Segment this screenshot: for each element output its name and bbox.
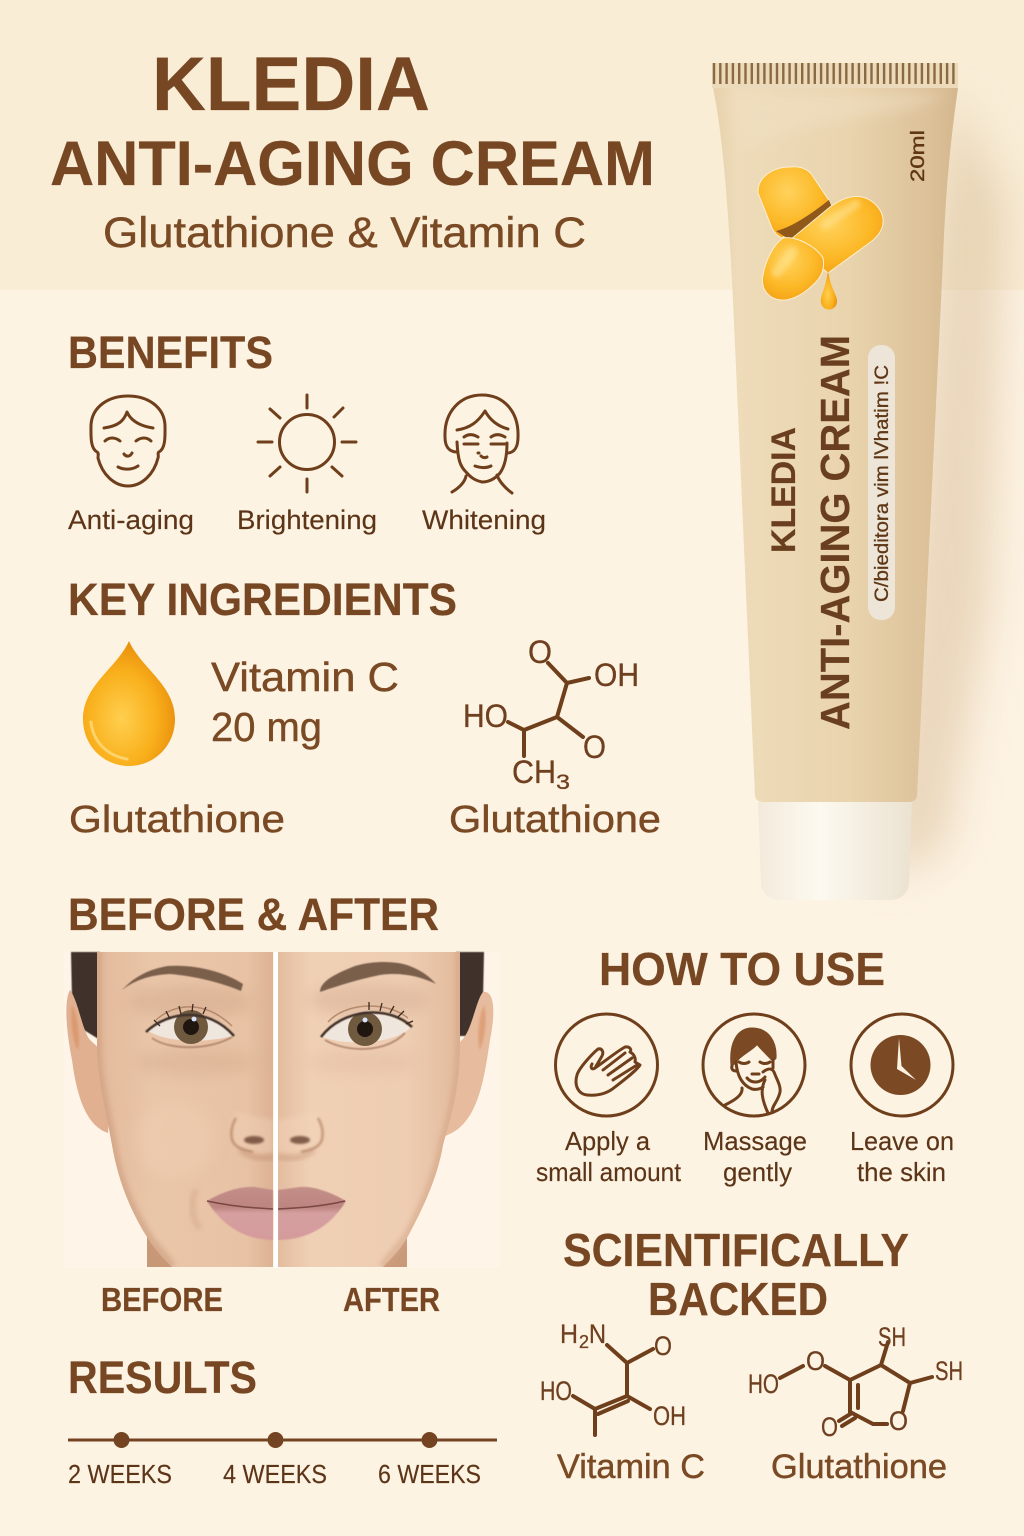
left inner ear — [71, 1005, 79, 1050]
icon: anti-aging face — [91, 396, 165, 486]
label: 2 weeks: 2 WEEKS — [68, 1459, 172, 1489]
molecule: vitamin c: HO — [540, 1376, 572, 1406]
icon: golden drop — [83, 641, 175, 766]
icon: massage face — [703, 1014, 805, 1116]
how to use heading: HOW TO USE — [599, 943, 885, 995]
right hair — [456, 952, 484, 1036]
molecule: glutathione: HO — [463, 698, 508, 734]
left ear — [66, 990, 112, 1133]
right ear — [440, 992, 493, 1136]
capsule: bottom left — [762, 238, 824, 300]
capsule band — [776, 200, 832, 240]
tube product name: ANTI-AGING CREAM — [812, 335, 858, 730]
scientifically backed heading: SCIENTIFICALLY — [563, 1224, 909, 1276]
label: brightening: Brightening — [237, 505, 377, 535]
right eyebrow — [320, 962, 436, 992]
molecule: vitamin c: N — [589, 1319, 606, 1349]
title: product: ANTI-AGING CREAM — [50, 129, 655, 199]
lip line — [207, 1201, 345, 1209]
molecule: glutathione: HO — [748, 1369, 779, 1399]
step 2 label — [703, 1126, 807, 1187]
title: brand: KLEDIA — [152, 42, 430, 127]
icon: sun — [258, 395, 356, 492]
benefits heading: BENEFITS — [68, 327, 273, 378]
molecule: glutathione: O — [889, 1406, 908, 1436]
tube ingredient pill: C/bieditora vim lVhatim !C — [872, 365, 893, 602]
step 1 label — [536, 1126, 682, 1187]
divider — [274, 952, 278, 1268]
panel: before and after — [64, 889, 500, 1318]
molecule: glutathione: O — [583, 729, 606, 765]
label: whitening: Whitening — [422, 505, 546, 535]
right eye — [321, 1002, 413, 1049]
label: vitamin c: Vitamin C — [557, 1448, 705, 1486]
capsule: right — [790, 196, 883, 273]
left face half — [90, 950, 274, 1268]
label: glutathione right: Glutathione — [449, 799, 661, 841]
before after heading: BEFORE & AFTER — [68, 889, 439, 940]
dose text: 20 mg — [211, 704, 322, 750]
tube crimp — [712, 63, 958, 88]
capsule highlight left — [777, 252, 792, 272]
20ml label: 20ml — [908, 130, 929, 182]
capsule illustration — [758, 167, 883, 310]
label: anti-aging: Anti-aging — [68, 505, 194, 535]
left eye — [146, 1004, 234, 1047]
label: before: BEFORE — [101, 1281, 223, 1318]
title block — [50, 42, 655, 257]
molecule: vitamin c: H — [560, 1319, 578, 1349]
scientifically backed heading — [563, 1224, 909, 1325]
molecule: glutathione — [748, 1322, 963, 1442]
molecule: glutathione: SH — [878, 1322, 906, 1352]
left eyebrow — [122, 966, 243, 991]
icon: whitening face — [445, 395, 518, 493]
step 3 label: the skin — [857, 1157, 946, 1187]
tube ingredient pill — [868, 345, 895, 620]
molecule: vitamin c: OH — [653, 1401, 686, 1431]
molecule: vitamin c: 2 — [579, 1332, 589, 1352]
tube body — [713, 88, 958, 802]
icon: clock — [851, 1014, 953, 1116]
label: 4 weeks: 4 WEEKS — [223, 1459, 327, 1489]
step 1 label: small amount — [536, 1157, 682, 1187]
tube brand: KLEDIA — [765, 427, 803, 553]
key ingredients heading: KEY INGREDIENTS — [68, 574, 457, 625]
right face half — [278, 950, 462, 1268]
label: after: AFTER — [343, 1281, 440, 1318]
header band — [0, 0, 1024, 290]
tube cap — [758, 802, 912, 900]
molecule: vitamin c: O — [654, 1331, 672, 1361]
label: glutathione left: Glutathione — [69, 799, 285, 841]
molecule: glutathione: 3 — [556, 771, 570, 794]
photo: face comparison — [64, 950, 500, 1268]
panel: key ingredients — [68, 574, 661, 841]
right inner ear — [478, 1005, 486, 1050]
left hair — [71, 952, 100, 1040]
molecule: glutathione: OH — [594, 657, 639, 693]
label: glutathione: Glutathione — [771, 1448, 947, 1486]
label: 6 weeks: 6 WEEKS — [378, 1459, 481, 1489]
step 2 label: gently — [723, 1157, 792, 1187]
molecule: glutathione: CH — [512, 754, 556, 790]
panel: scientifically backed — [540, 1224, 963, 1486]
tube highlight — [728, 94, 945, 150]
oil drop — [821, 270, 837, 310]
step 3 label — [850, 1126, 954, 1187]
product tube — [712, 63, 1005, 900]
left lips — [207, 1187, 273, 1240]
molecule: vitamin c — [540, 1319, 686, 1435]
molecule: glutathione: SH — [935, 1356, 963, 1386]
step 1 label: Apply a — [565, 1126, 651, 1156]
vitamin c text: Vitamin C — [211, 654, 399, 700]
molecule: glutathione: O — [528, 634, 552, 670]
panel: benefits — [68, 327, 546, 535]
panel: results — [68, 1352, 497, 1489]
molecule: glutathione: O — [821, 1412, 838, 1442]
subtitle: Glutathione & Vitamin C — [103, 209, 586, 257]
step 3 label: Leave on — [850, 1126, 954, 1156]
results heading: RESULTS — [68, 1352, 257, 1403]
icon: hand — [556, 1014, 658, 1116]
panel: how to use — [536, 943, 954, 1187]
molecule: glutathione: O — [806, 1346, 825, 1376]
scientifically backed heading: BACKED — [648, 1273, 828, 1325]
capsule: top left — [758, 167, 830, 238]
molecule: glutathione — [463, 634, 639, 794]
tube shadow — [880, 90, 1005, 880]
capsule highlight right — [825, 204, 856, 225]
step 2 label: Massage — [703, 1126, 807, 1156]
right lips — [278, 1187, 346, 1240]
timeline — [68, 1432, 497, 1448]
